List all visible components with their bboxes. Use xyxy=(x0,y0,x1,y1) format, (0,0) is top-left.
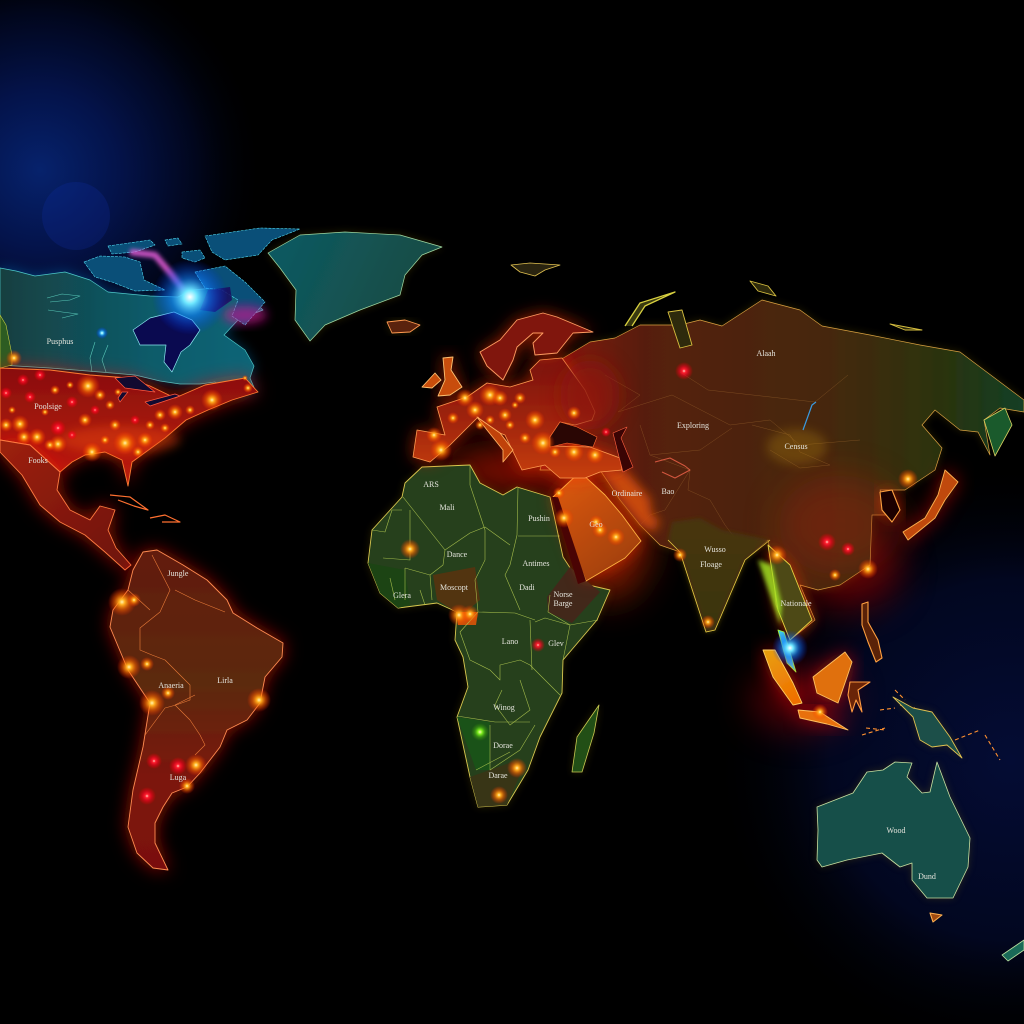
country labels: ARS xyxy=(423,480,439,489)
country labels: Jungle xyxy=(168,569,189,578)
east asia warm tint xyxy=(778,475,902,575)
country labels: Geo xyxy=(589,520,603,529)
country labels: Glera xyxy=(393,591,411,600)
country labels: Lano xyxy=(502,637,518,646)
canada inland marks xyxy=(47,294,108,372)
black sea xyxy=(550,422,597,447)
asia borders xyxy=(605,372,860,545)
flare: magenta glow xyxy=(223,306,267,324)
africa xyxy=(368,465,610,807)
sumatra xyxy=(763,650,802,705)
mexico and central america xyxy=(0,440,131,570)
caribbean islands xyxy=(110,495,180,522)
country labels: Darae xyxy=(488,771,508,780)
ireland xyxy=(422,373,441,388)
country labels: Antimes xyxy=(522,559,550,568)
australia xyxy=(817,762,970,898)
country labels: Glev xyxy=(548,639,564,648)
arabia xyxy=(553,472,641,581)
flare: magenta arc xyxy=(130,252,185,292)
country labels: Pusphus xyxy=(47,337,73,346)
arctic islands xyxy=(84,228,300,325)
alaska edge glow xyxy=(0,315,12,368)
south america borders xyxy=(128,555,225,755)
country labels: Luga xyxy=(170,773,187,782)
korea xyxy=(880,490,900,522)
lesser islands xyxy=(862,690,1000,760)
indochina xyxy=(768,545,812,640)
myanmar green glow xyxy=(758,560,782,625)
north america: canada xyxy=(0,268,263,394)
caspian sea xyxy=(613,427,633,472)
usa xyxy=(0,368,258,486)
country labels: Alaah xyxy=(756,349,776,358)
philippines xyxy=(862,602,882,662)
uk xyxy=(438,357,462,396)
iran and gulf xyxy=(600,470,660,532)
country labels: Anaeria xyxy=(158,681,184,690)
city lights: south america xyxy=(108,588,271,805)
country labels: Dadi xyxy=(519,583,536,592)
quebec dark violet patch xyxy=(200,287,232,312)
country labels: Fooks xyxy=(28,456,48,465)
country labels: Exploring xyxy=(677,421,709,430)
africa borders xyxy=(372,465,598,770)
flare: bright star over hudson xyxy=(152,259,228,335)
hudson bay xyxy=(133,312,200,372)
sulawesi xyxy=(848,682,870,712)
country labels: Dorae xyxy=(493,741,513,750)
country labels: Norse xyxy=(553,590,573,599)
usa southern warm band xyxy=(60,426,180,454)
eastern europe blend xyxy=(560,360,620,430)
south america xyxy=(110,550,283,870)
country labels: Moscopt xyxy=(440,583,469,592)
red sea xyxy=(552,497,586,584)
mongolia pin line xyxy=(803,402,816,430)
country labels: Bao xyxy=(662,487,674,496)
world map xyxy=(0,228,1024,961)
country labels: Nationale xyxy=(780,599,812,608)
city lights: europe xyxy=(426,384,611,464)
japan xyxy=(903,470,958,540)
central asia pale lines xyxy=(655,458,690,478)
tasmania xyxy=(930,913,942,922)
country labels xyxy=(28,337,936,881)
italy xyxy=(477,417,513,462)
new guinea xyxy=(893,697,962,758)
country labels: Floage xyxy=(700,560,722,569)
iceland xyxy=(387,320,420,333)
kamchatka xyxy=(984,408,1012,456)
country labels: Dund xyxy=(918,872,936,881)
country labels: Census xyxy=(784,442,808,451)
borneo xyxy=(813,652,852,703)
country labels: Winog xyxy=(493,703,515,712)
greenland xyxy=(268,232,442,341)
new zealand xyxy=(1002,940,1024,961)
northern islands xyxy=(668,281,922,348)
city lights: asia xyxy=(673,362,918,720)
india xyxy=(668,518,770,632)
country labels: Dance xyxy=(447,550,468,559)
java xyxy=(798,710,848,730)
europe mainland xyxy=(413,358,622,478)
country labels: Ordinaire xyxy=(612,489,643,498)
scandinavia xyxy=(480,313,593,380)
country labels: Barge xyxy=(554,599,573,608)
country labels: Wood xyxy=(887,826,905,835)
mongolia glow xyxy=(767,429,827,465)
country labels: Pushin xyxy=(528,514,550,523)
city lights: africa and middle east xyxy=(400,487,625,804)
malay peninsula blue xyxy=(778,630,796,672)
svalbard xyxy=(511,263,560,276)
madagascar xyxy=(572,705,599,772)
asia xyxy=(540,300,1024,640)
country labels: Wusso xyxy=(704,545,726,554)
country labels: Poolsige xyxy=(34,402,62,411)
city lights: north america xyxy=(0,327,253,462)
africa regional tints xyxy=(368,563,600,807)
region glow: middle east and mediterranean xyxy=(440,450,900,730)
country labels: Lirla xyxy=(217,676,233,685)
country labels: Mali xyxy=(439,503,455,512)
novaya zemlya xyxy=(625,292,675,326)
great lakes xyxy=(115,376,180,406)
